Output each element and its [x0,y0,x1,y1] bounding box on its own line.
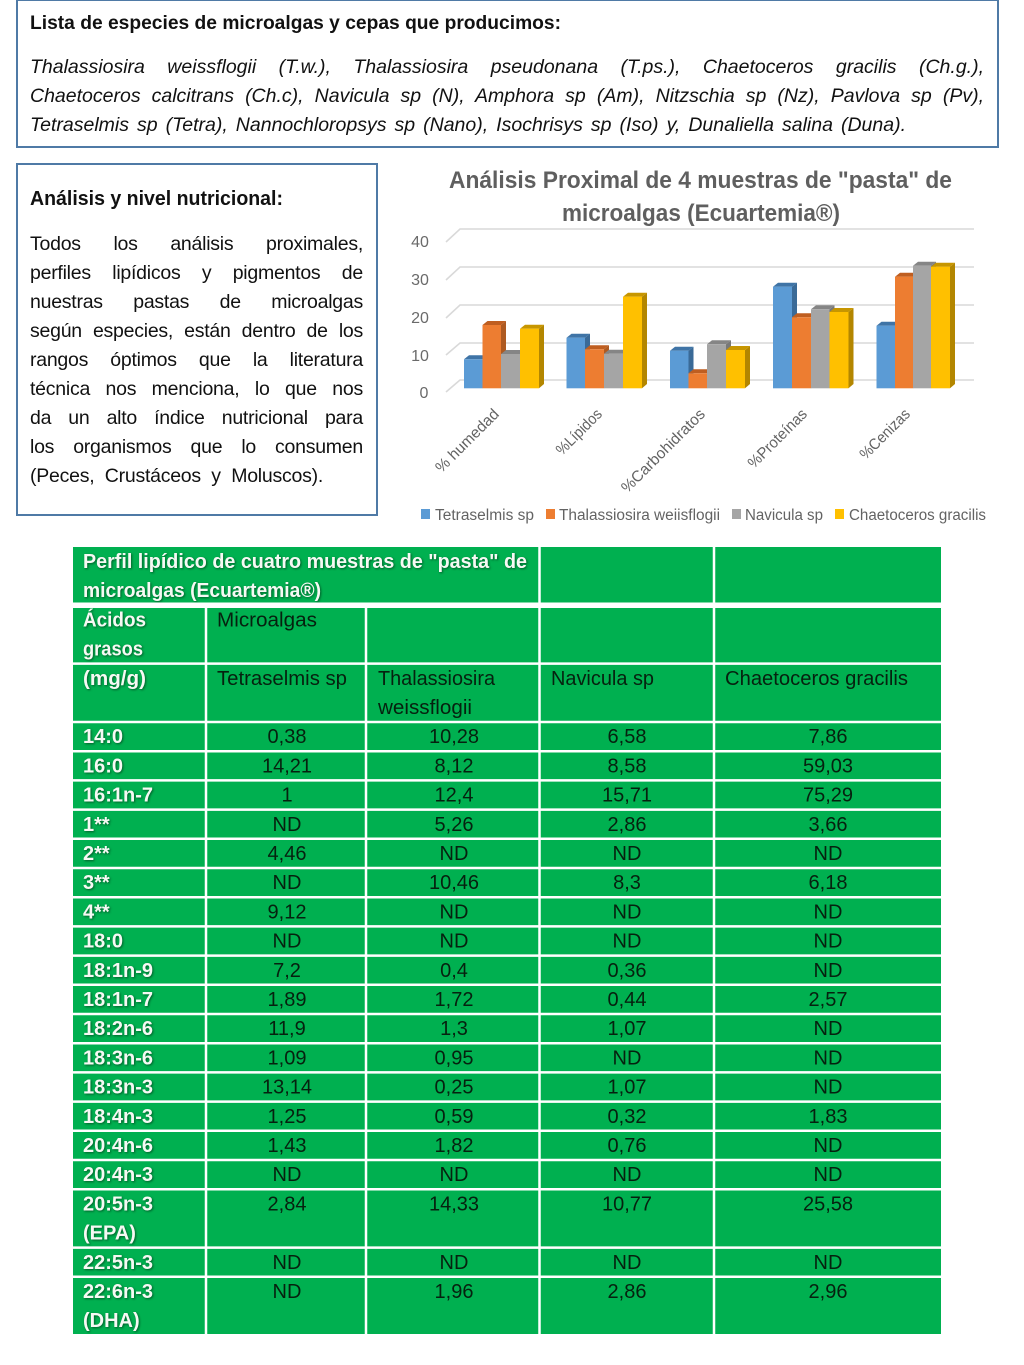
column: Chaetoceros gracilis values: ND [814,901,842,923]
row labels: fatty acids: 18:1n-7 [83,989,153,1011]
column: Chaetoceros gracilis values: 2,57 [809,989,847,1011]
column: Thalassiosira weissflogii values: 14,33 [429,1193,479,1215]
column: Navicula sp values: 8,3 [613,872,641,894]
column: Navicula sp values: 1,07 [608,1077,646,1099]
y axis labels: 20 [411,310,429,327]
table heading: microalgas (Ecuartemia®) [83,580,321,602]
column: Chaetoceros gracilis values: 6,18 [809,872,847,894]
column: Tetraselmis sp values: ND [273,1252,301,1274]
row labels: fatty acids: (EPA) [83,1223,136,1245]
heading: nutritional analysis: Análisis y nivel nutricional: [30,188,283,210]
x axis labels: % humedad [432,406,503,476]
column: Thalassiosira weissflogii values: 0,25 [435,1077,473,1099]
text block: nutritional analysis [30,232,364,487]
column: Navicula sp values: 1,07 [608,1018,646,1040]
y axis labels: 0 [420,385,429,402]
text block: nutritional analysis: los organismos que lo consumen [30,436,363,458]
column: Tetraselmis sp values: 4,46 [268,843,306,865]
row labels: fatty acids: (DHA) [83,1310,140,1332]
column headers: Thalassiosira [378,668,496,690]
column: Thalassiosira weissflogii values [429,726,479,1303]
text block: nutritional analysis: rangos óptimos que la literatura [30,349,363,371]
column headers: Microalgas [217,609,317,631]
column: Thalassiosira weissflogii values: ND [440,1252,468,1274]
chart title [449,167,952,227]
column: Thalassiosira weissflogii values: ND [440,931,468,953]
table heading: Perfil lipídico de cuatro muestras de "pasta" de [83,551,527,573]
text block: nutritional analysis: (Peces, Crustáceos y Moluscos). [30,465,323,487]
chart title: microalgas (Ecuartemia®) [562,200,840,227]
text block: nutritional analysis: perfiles lipídicos y pigmentos de [30,262,363,284]
column: Tetraselmis sp values: 1,09 [268,1047,306,1069]
column: Tetraselmis sp values: 0,38 [268,726,306,748]
column: Chaetoceros gracilis values: 7,86 [809,726,847,748]
column headers [217,609,908,719]
x axis labels [432,406,914,496]
bars: % cenizas [876,262,955,388]
row labels: fatty acids: 18:0 [83,931,123,953]
legend: Tetraselmis sp [435,507,534,524]
column: Tetraselmis sp values: 11,9 [268,1018,306,1040]
text block: nutritional analysis: Todos los análisis proximales, [30,232,363,254]
table heading [83,551,527,602]
column: Navicula sp values: 0,76 [608,1135,646,1157]
column: Thalassiosira weissflogii values: 0,4 [440,960,468,982]
column: Navicula sp values: 6,58 [608,726,646,748]
column: Tetraselmis sp values: ND [273,931,301,953]
x axis labels: %Proteínas [745,406,811,472]
column: Chaetoceros gracilis values: ND [814,843,842,865]
column: Chaetoceros gracilis values: 1,83 [809,1106,847,1128]
row labels: fatty acids: 20:5n-3 [83,1193,153,1215]
row labels: fatty acids: 22:5n-3 [83,1252,153,1274]
row labels: fatty acids: 18:3n-6 [83,1047,153,1069]
row labels: fatty acids: 20:4n-3 [83,1164,153,1186]
column headers: Navicula sp [551,668,654,690]
bars: % carbohidratos [670,340,750,388]
column: Tetraselmis sp values: 1,89 [268,989,306,1011]
column: Thalassiosira weissflogii values: 10,28 [429,726,479,748]
column headers: Tetraselmis sp [217,668,347,690]
column: Chaetoceros gracilis values: 25,58 [803,1193,853,1215]
column: Chaetoceros gracilis values: ND [814,1047,842,1069]
column: Navicula sp values [602,726,652,1303]
column: Navicula sp values: ND [613,843,641,865]
column: Chaetoceros gracilis values: ND [814,960,842,982]
column: Navicula sp values: ND [613,1047,641,1069]
row labels: fatty acids: 16:0 [83,755,123,777]
row labels: fatty acids: grasos [83,639,143,661]
column: Navicula sp values: 2,86 [608,814,646,836]
column: Tetraselmis sp values: ND [273,814,301,836]
column: Navicula sp values: 8,58 [608,755,646,777]
x axis labels: %Cenizas [857,406,914,463]
row labels: fatty acids: 18:4n-3 [83,1106,153,1128]
column: Tetraselmis sp values: ND [273,1164,301,1186]
column: Tetraselmis sp values: ND [273,872,301,894]
column: Tetraselmis sp values: 13,14 [262,1077,312,1099]
column: Navicula sp values: 0,32 [608,1106,646,1128]
column: Tetraselmis sp values: 1,43 [268,1135,306,1157]
y axis labels: 10 [411,348,429,365]
bars: % humedad [464,321,544,388]
row labels: fatty acids: 16:1n-7 [83,785,153,807]
column: Chaetoceros gracilis values: ND [814,1077,842,1099]
bars: % proteinas [773,283,854,388]
column: Tetraselmis sp values: 2,84 [268,1193,306,1215]
column: Tetraselmis sp values: 1,25 [268,1106,306,1128]
row labels: fatty acids: Ácidos [83,608,146,631]
column: Thalassiosira weissflogii values: 1,96 [435,1281,473,1303]
column: Thalassiosira weissflogii values: 8,12 [435,755,473,777]
x axis labels: %Carbohidratos [618,406,709,496]
row labels: fatty acids: 4** [83,901,110,923]
row labels: fatty acids: 18:2n-6 [83,1018,153,1040]
column: Chaetoceros gracilis values: ND [814,1135,842,1157]
legend [421,507,986,524]
column headers: Chaetoceros gracilis [725,668,908,690]
row labels: fatty acids: 14:0 [83,726,123,748]
chart title: Análisis Proximal de 4 muestras de "pasta" de [449,167,952,194]
row labels: fatty acids: 2** [83,843,110,865]
column: Thalassiosira weissflogii values: 1,72 [435,989,473,1011]
column: Chaetoceros gracilis values: 3,66 [809,814,847,836]
column: Thalassiosira weissflogii values: 1,3 [440,1018,468,1040]
column: Tetraselmis sp values [262,726,312,1303]
column: Chaetoceros gracilis values: ND [814,931,842,953]
column: Tetraselmis sp values: ND [273,1281,301,1303]
panel: nutritional analysis [16,163,378,516]
panel: species list [16,0,999,148]
column: Thalassiosira weissflogii values: 12,4 [435,785,473,807]
text block: nutritional analysis: según especies, están dentro de los [30,320,363,342]
column: Thalassiosira weissflogii values: 1,82 [435,1135,473,1157]
column: Navicula sp values: 2,86 [608,1281,646,1303]
column: Chaetoceros gracilis values: ND [814,1164,842,1186]
column: Thalassiosira weissflogii values: ND [440,843,468,865]
y axis labels [411,234,429,402]
text block: nutritional analysis: nuestras pastas de microalgas [30,290,363,312]
row labels: fatty acids [83,608,153,1332]
row labels: fatty acids: 22:6n-3 [83,1281,153,1303]
column: Tetraselmis sp values: 7,2 [273,960,301,982]
column: Navicula sp values: 10,77 [602,1193,652,1215]
text block: species list [30,56,984,136]
column: Thalassiosira weissflogii values: 0,95 [435,1047,473,1069]
text block: species list: Thalassiosira weissflogii (T.w.), Thalassiosira pseudonana (T.ps.), Chaetoceros gracilis (Ch.g.), [30,56,984,78]
legend: Thalassiosira weiisflogii [559,507,720,524]
column: Thalassiosira weissflogii values: ND [440,901,468,923]
column: Chaetoceros gracilis values: 75,29 [803,785,853,807]
column: Navicula sp values: ND [613,1252,641,1274]
row labels: fatty acids: 18:1n-9 [83,960,153,982]
column: Thalassiosira weissflogii values: 0,59 [435,1106,473,1128]
column headers: weissflogii [377,697,472,719]
column: Chaetoceros gracilis values: 59,03 [803,755,853,777]
column: Tetraselmis sp values: 1 [281,785,293,807]
column: Thalassiosira weissflogii values: ND [440,1164,468,1186]
table: lipid profile [73,547,941,1334]
bars: % lipidos [566,293,647,388]
column: Chaetoceros gracilis values: 2,96 [809,1281,847,1303]
column: Chaetoceros gracilis values: ND [814,1252,842,1274]
y axis labels: 30 [411,272,429,289]
row labels: fatty acids: 20:4n-6 [83,1135,153,1157]
text block: species list: Chaetoceros calcitrans (Ch.c), Navicula sp (N), Amphora sp (Am), Nitzschia sp (Nz), Pavlova sp (Pv), [30,84,984,106]
column: Navicula sp values: ND [613,1164,641,1186]
legend: Navicula sp [745,507,823,524]
heading: species list: Lista de especies de microalgas y cepas que producimos: [30,12,561,34]
column: Navicula sp values: 15,71 [602,785,652,807]
column: Chaetoceros gracilis values [803,726,853,1303]
column: Thalassiosira weissflogii values: 10,46 [429,872,479,894]
column: Navicula sp values: 0,44 [608,989,646,1011]
row labels: fatty acids: (mg/g) [83,668,146,690]
y axis labels: 40 [411,234,429,251]
column: Tetraselmis sp values: 14,21 [262,755,312,777]
column: Chaetoceros gracilis values: ND [814,1018,842,1040]
chart: proximal analysis 3D bars [411,167,986,524]
column: Thalassiosira weissflogii values: 5,26 [435,814,473,836]
x axis labels: %Lípidos [553,406,606,459]
text block: nutritional analysis: técnica nos menciona, lo que nos [30,378,363,400]
row labels: fatty acids: 3** [83,872,110,894]
column: Tetraselmis sp values: 9,12 [268,901,306,923]
column: Navicula sp values: 0,36 [608,960,646,982]
text block: nutritional analysis: da un alto índice nutricional para [30,407,363,429]
column: Navicula sp values: ND [613,931,641,953]
column: Navicula sp values: ND [613,901,641,923]
legend: Chaetoceros gracilis [849,507,986,524]
row labels: fatty acids: 1** [83,814,110,836]
text block: species list: Tetraselmis sp (Tetra), Nannochloropsys sp (Nano), Isochrisys sp (Iso) y, Dunaliella salina (Duna). [30,114,906,136]
row labels: fatty acids: 18:3n-3 [83,1077,153,1099]
